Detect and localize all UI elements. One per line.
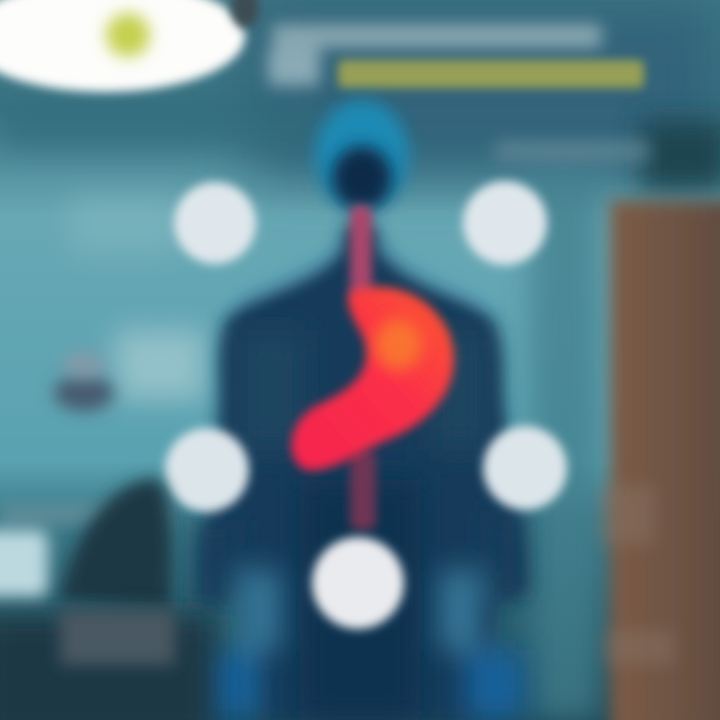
esophagus <box>350 205 372 300</box>
intestine tube <box>350 450 376 530</box>
head <box>315 100 409 210</box>
shoulders and torso <box>205 225 525 720</box>
wall object <box>54 351 114 411</box>
callout circle: upper left <box>174 182 256 264</box>
blue body outline glow <box>225 240 340 308</box>
darker torso shading <box>235 330 490 720</box>
callout circle: upper right <box>463 181 547 265</box>
human body figure <box>195 100 525 720</box>
white counter <box>0 530 48 598</box>
heading <box>268 24 650 162</box>
seated dark silhouette <box>0 478 215 720</box>
callout circle: middle left <box>165 428 249 512</box>
ceiling lamp <box>0 0 259 92</box>
callout circle: middle right <box>483 426 567 510</box>
callout circle: bottom centre <box>312 537 404 629</box>
stomach <box>291 287 454 471</box>
heading line one, unreadable pale band <box>268 24 602 86</box>
wooden door <box>600 200 720 720</box>
subheading, unreadable band <box>495 140 650 162</box>
heading line two, unreadable yellow band <box>338 60 644 88</box>
arms and legs <box>195 510 525 720</box>
